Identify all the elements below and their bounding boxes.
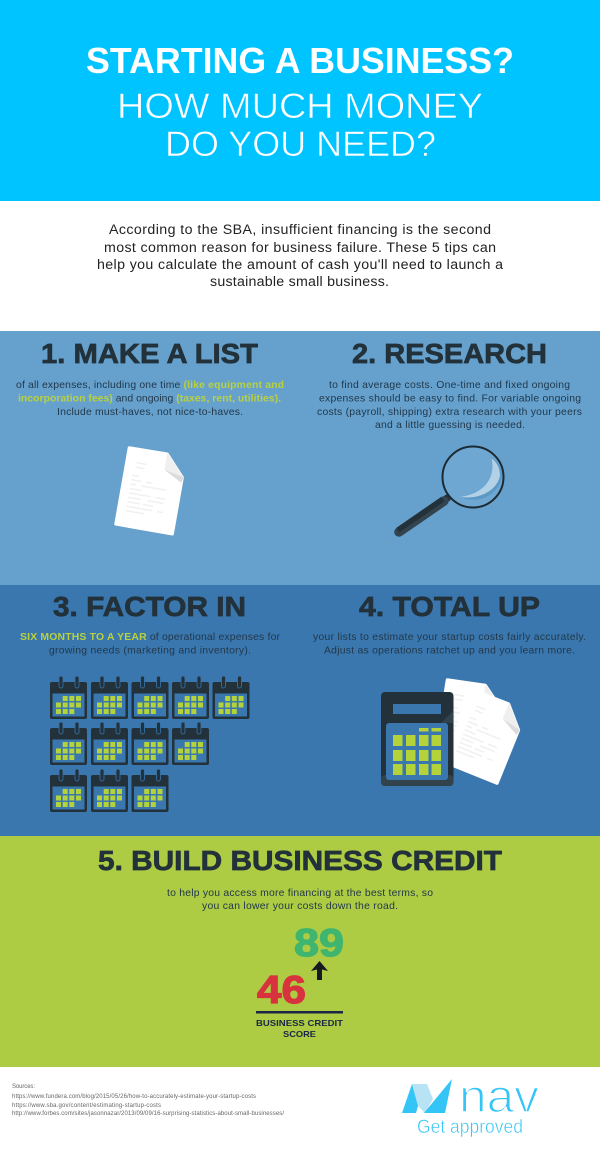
text: step 3 description: SIX MONTHS TO A YEAR of operational expenses for — [20, 632, 281, 643]
heading: 4. total up: 4. TOTAL UP — [359, 591, 540, 622]
panel: step 4 total up — [313, 591, 586, 786]
number: score 89: 89 — [294, 922, 344, 965]
panel: steps 3 and 4 background — [0, 585, 600, 836]
intro text block: help you calculate the amount of cash you'll need to launch a — [97, 257, 503, 273]
text: step 3 description: growing needs (marketing and inventory). — [49, 646, 251, 656]
title: do you need: DO YOU NEED? — [165, 125, 436, 164]
panel: step 5 build business credit — [0, 836, 600, 1067]
icon: documents behind calculator — [435, 678, 528, 784]
text: step 2 description: and a little guessing is needed. — [375, 420, 525, 431]
heading: 3. factor in: 3. FACTOR IN — [53, 591, 246, 622]
panel: steps 1 and 2 background — [0, 331, 600, 585]
heading: 2. research: 2. RESEARCH — [352, 338, 547, 369]
text: step 1 description — [16, 380, 284, 418]
intro text block — [97, 222, 503, 290]
text: step 4 description: Adjust as operations ratchet up and you learn more. — [324, 646, 575, 656]
label: business credit score: SCORE — [283, 1029, 316, 1039]
intro text block: most common reason for business failure. These 5 tips can — [104, 240, 496, 256]
text: sources: https://www.sba.gov/content/estimating-startup-costs — [12, 1103, 161, 1109]
label: business credit score — [256, 1018, 344, 1039]
panel: title banner — [0, 0, 600, 201]
icon grid: twelve calendars — [50, 676, 250, 812]
panel: step 1 make a list — [16, 338, 284, 534]
title: how much money: HOW MUCH MONEY — [117, 87, 483, 126]
icon: nav mark — [402, 1079, 452, 1113]
text: step 5 description: you can lower your costs down the road. — [202, 901, 398, 912]
text: sources: https://www.fundera.com/blog/2015/05/26/how-to-accurately-estimate-your-startup-costs — [12, 1094, 256, 1100]
tagline: get approved: Get approved — [417, 1117, 523, 1138]
logo: nav get approved — [402, 1070, 539, 1138]
heading: 5. build business credit: 5. BUILD BUSINESS CREDIT — [98, 845, 502, 876]
wordmark: nav: nav — [459, 1070, 539, 1122]
text: step 2 description — [317, 380, 582, 431]
text: sources: Sources: — [12, 1084, 35, 1090]
text: step 4 description — [313, 632, 586, 656]
number: score 46: 46 — [257, 969, 306, 1012]
intro text block: sustainable small business. — [210, 274, 389, 290]
text: step 2 description: to find average costs. One-time and fixed ongoing — [329, 380, 570, 391]
text: step 1 description: Include must-haves, not nice-to-haves. — [57, 407, 243, 418]
text: sources — [12, 1084, 284, 1117]
arrow: score increase — [311, 961, 328, 980]
text: step 5 description: to help you access more financing at the best terms, so — [167, 888, 433, 899]
intro text block: According to the SBA, insufficient financing is the second — [109, 222, 491, 238]
text: sources: http://www.forbes.com/sites/jasonnazar/2013/09/09/16-surprising-statistics-about-small-businesses/ — [12, 1111, 284, 1117]
text: step 2 description: costs (payroll, shipping) extra research with your peers — [317, 407, 582, 418]
panel: step 2 research — [317, 338, 582, 532]
chart: business credit score — [256, 922, 344, 1039]
title: starting a business: STARTING A BUSINESS? — [86, 40, 514, 81]
text: step 4 description: your lists to estimate your startup costs fairly accurately. — [313, 632, 586, 643]
text: step 3 description — [20, 632, 281, 656]
text: step 1 description: incorporation fees) and ongoing (taxes, rent, utilities). — [18, 394, 281, 404]
panel: step 3 factor in — [20, 591, 281, 812]
icon: magnifying glass — [398, 446, 504, 532]
text: step 1 description: of all expenses, including one time (like equipment and — [16, 380, 284, 391]
heading: 1. make a list: 1. MAKE A LIST — [41, 338, 258, 369]
icon: document — [116, 446, 187, 534]
label: business credit score: BUSINESS CREDIT — [256, 1018, 344, 1028]
text: step 2 description: expenses should be easy to find. For variable ongoing — [319, 394, 581, 404]
icon: calculator — [381, 692, 454, 786]
text: step 5 description — [167, 888, 433, 912]
